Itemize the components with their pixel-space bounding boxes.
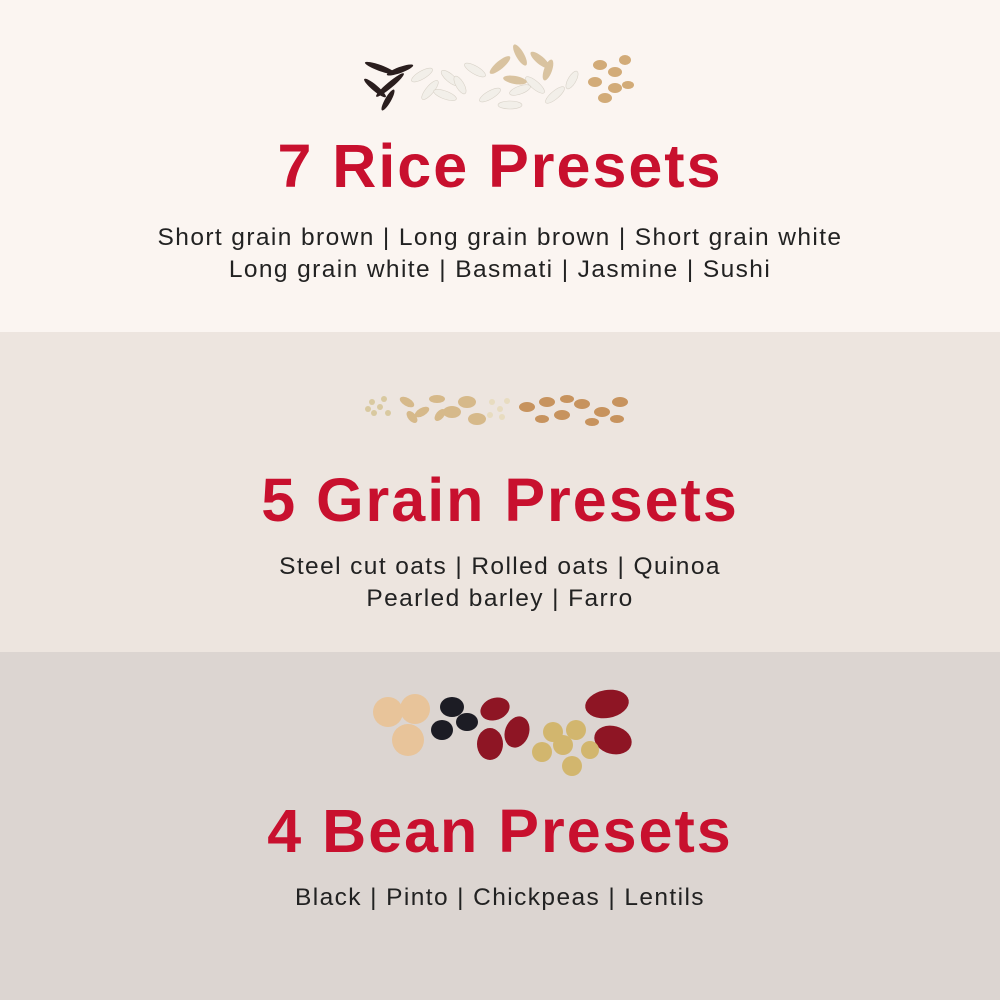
heading: grain: 5 Grain Presets (261, 466, 739, 534)
panel: grain (0, 332, 1000, 652)
icon: beans (373, 690, 632, 776)
icon: grains (365, 395, 628, 426)
icon: rice grains (364, 44, 634, 110)
text: grain list: Steel cut oats | Rolled oats | Quinoa (279, 553, 721, 580)
text: grain list: Pearled barley | Farro (366, 585, 634, 612)
text: rice list (158, 224, 842, 283)
heading: rice: 7 Rice Presets (277, 132, 723, 200)
text: bean list: Black | Pinto | Chickpeas | Lentils (295, 884, 705, 911)
panel: bean (0, 652, 1000, 1000)
heading: bean: 4 Bean Presets (267, 797, 733, 865)
text: grain list (279, 553, 721, 612)
text: rice list: Short grain brown | Long grain brown | Short grain white (158, 224, 842, 251)
panel: rice (0, 0, 1000, 332)
text: rice list: Long grain white | Basmati | Jasmine | Sushi (229, 256, 771, 283)
